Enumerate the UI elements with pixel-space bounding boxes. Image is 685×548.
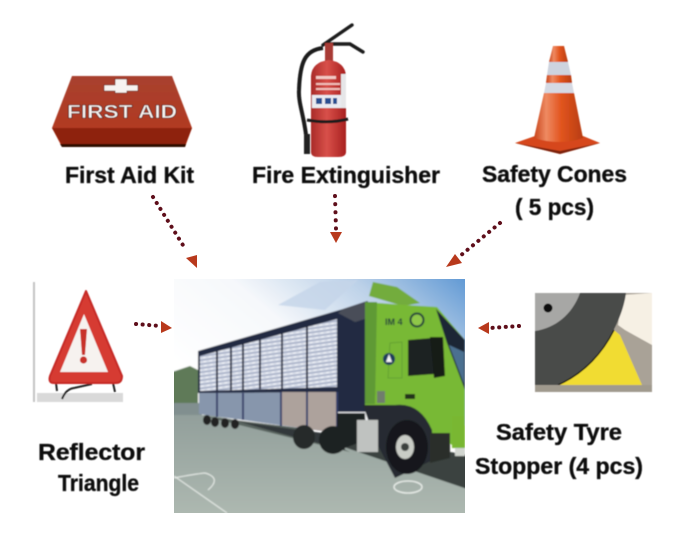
cab: [369, 282, 420, 306]
label: safety tyre stopper: [475, 419, 643, 479]
arrow: fire extinguisher to truck: [330, 196, 342, 243]
label: safety cones: Safety Cones: [482, 161, 627, 187]
icon: first aid kit: FIRST AID: [67, 102, 177, 122]
label: reflector triangle: Reflector: [38, 439, 145, 465]
label: safety tyre stopper: Stopper (4 pcs): [475, 453, 643, 479]
icon: fire extinguisher: [299, 25, 363, 157]
arrow: reflector triangle to truck: [136, 321, 172, 333]
icon: safety cone: [515, 46, 600, 154]
arrow: first aid kit to truck: [153, 197, 197, 268]
icon: first aid kit: [52, 76, 192, 147]
arrow: tyre stopper to truck: [478, 322, 519, 334]
label: fire extinguisher: Fire Extinguisher: [252, 162, 440, 188]
photo: green truck with loaded trailer: [170, 275, 470, 518]
label: safety cones: [482, 161, 627, 220]
arrow: safety cones to truck: [446, 223, 500, 267]
label: safety cones: ( 5 pcs): [515, 194, 594, 220]
icon: tyre stopper: [535, 293, 652, 392]
label: first aid kit: First Aid Kit: [65, 162, 194, 188]
label: reflector triangle: [38, 439, 145, 496]
label: safety tyre stopper: Safety Tyre: [496, 419, 622, 445]
label: reflector triangle: Triangle: [58, 470, 139, 496]
icon: reflector triangle: [33, 282, 123, 402]
photo: green truck with loaded trailer: IM 4: [385, 317, 403, 327]
trailer body: [198, 301, 370, 412]
